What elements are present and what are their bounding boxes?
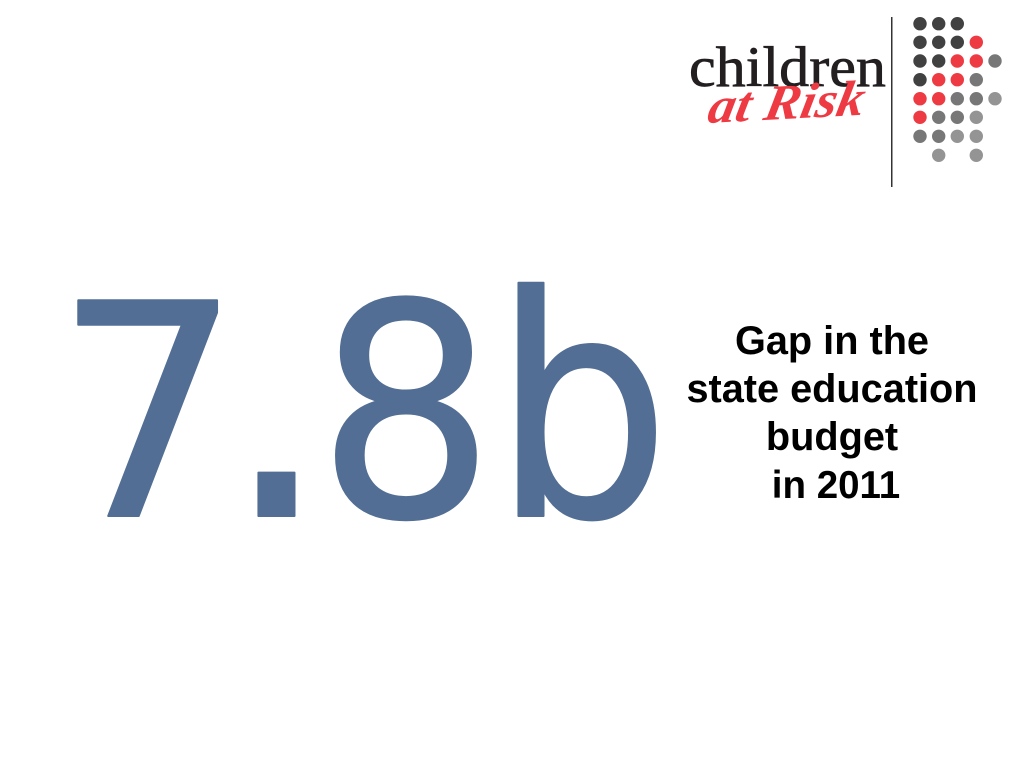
caption: gap in the state education budget in 2011: Gap in the <box>735 319 929 363</box>
big number: 7.8b: . <box>221 191 332 599</box>
big number: 7.8b: 7 <box>54 241 242 586</box>
big number: 7.8b <box>54 191 670 599</box>
caption: gap in the state education budget in 2011: budget <box>766 415 898 459</box>
caption: gap in the state education budget in 2011 <box>686 319 978 507</box>
caption: gap in the state education budget in 2011: in 2011 <box>772 464 900 507</box>
logo: Children at Risk <box>689 17 1002 187</box>
caption: gap in the state education budget in 2011: state education <box>686 367 978 411</box>
logo dot grid <box>913 17 1002 162</box>
logo script: at Risk: at Risk <box>704 70 871 134</box>
big number: 7.8b: 8 <box>317 242 495 586</box>
logo wordmark: children: children <box>689 36 886 99</box>
big number: 7.8b: b <box>493 233 670 589</box>
logo divider line <box>891 17 892 187</box>
